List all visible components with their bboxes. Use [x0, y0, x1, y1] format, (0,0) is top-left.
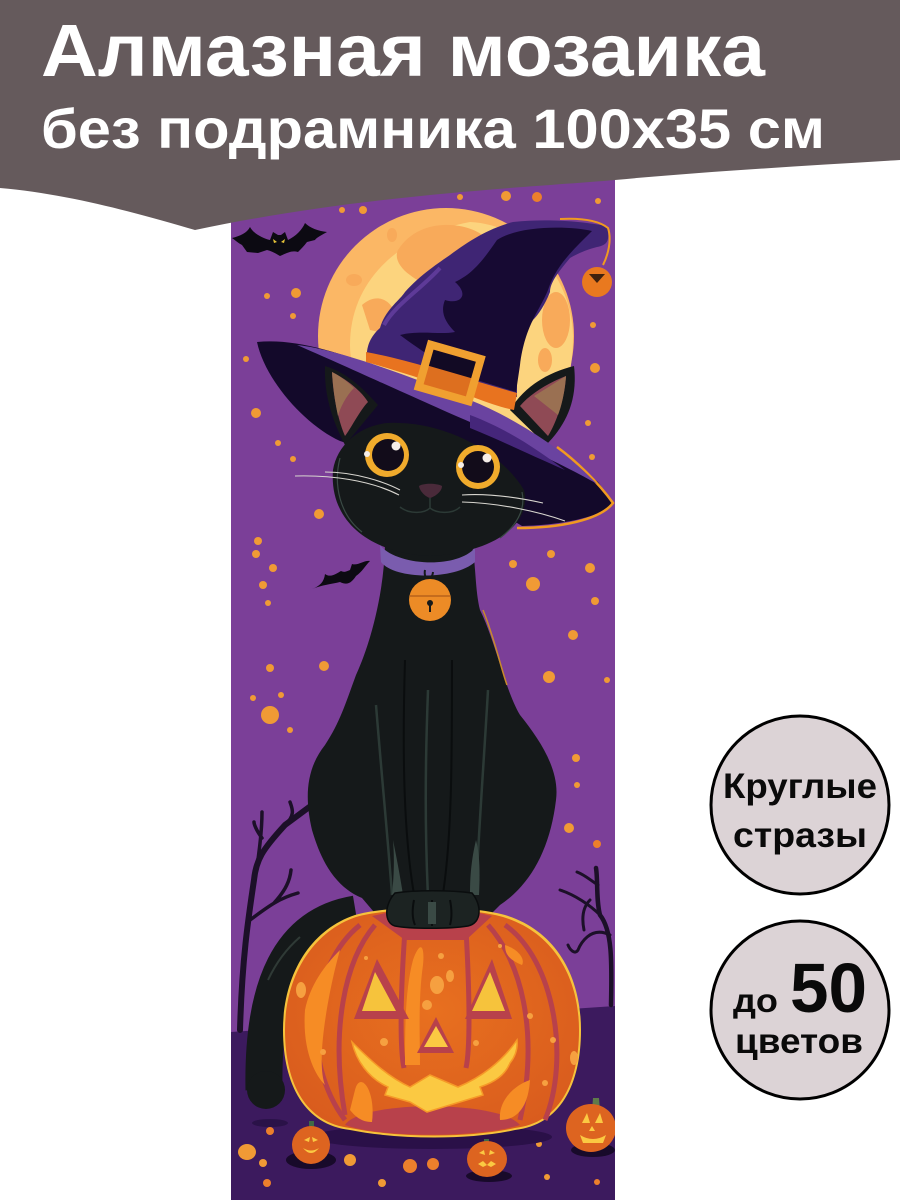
badge: up to 50 colours — [711, 921, 889, 1099]
hat buckle — [419, 345, 481, 401]
bat: top left — [232, 223, 327, 256]
bat: small by collar — [312, 561, 370, 589]
collar bell — [409, 570, 451, 621]
small pumpkin: right — [566, 1098, 616, 1157]
cat head with ear — [295, 366, 565, 576]
collar — [380, 545, 475, 576]
poster: halloween cat artwork — [231, 170, 616, 1200]
nose and mouth — [400, 484, 460, 512]
cat ear: right — [510, 366, 575, 445]
hat band — [366, 352, 517, 410]
hat tassel and bell — [560, 219, 610, 265]
cat paws — [387, 891, 479, 928]
cat tail — [247, 914, 356, 1127]
eye: left — [364, 433, 409, 477]
heading line 1: Алмазная мозаика — [41, 9, 766, 92]
whiskers — [295, 472, 565, 521]
badge: up to 50 colours: до — [733, 982, 778, 1019]
hat brim — [257, 341, 614, 528]
front legs — [376, 660, 488, 900]
pumpkin: large jack-o-lantern — [283, 908, 581, 1149]
moon — [318, 208, 574, 434]
head shape — [333, 423, 525, 556]
tree: left — [240, 802, 312, 1030]
pumpkin face — [354, 959, 409, 1019]
ground — [231, 1006, 615, 1200]
badge: up to 50 colours: цветов — [735, 1022, 863, 1061]
title — [41, 9, 825, 160]
small pumpkin: centre — [466, 1139, 512, 1182]
badge: round rhinestones: стразы — [733, 816, 867, 855]
hat cone — [367, 220, 608, 397]
eye: right — [456, 445, 500, 489]
tree: right — [560, 868, 611, 1005]
hat brim band — [297, 345, 597, 484]
heading line 2: без подрамника 100х35 см — [41, 97, 825, 160]
ear: left — [325, 366, 378, 445]
cat body — [308, 545, 557, 925]
badge: round rhinestones — [711, 716, 889, 894]
badge: round rhinestones: Круглые — [723, 767, 877, 806]
small pumpkin: left — [286, 1121, 336, 1169]
banner — [0, 0, 900, 230]
badge: up to 50 colours: 50 — [790, 949, 867, 1027]
witch hat — [297, 219, 612, 484]
background dots — [238, 191, 610, 1187]
